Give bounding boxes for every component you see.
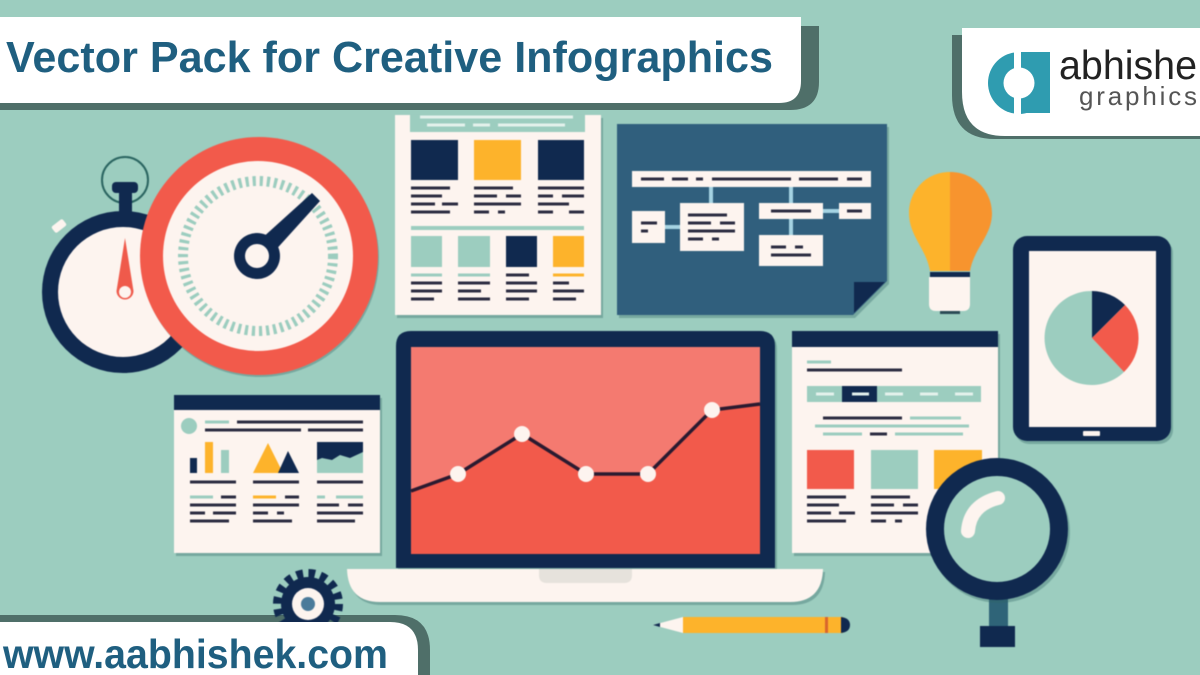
triangle chart <box>253 443 299 473</box>
icon: gear <box>278 574 338 634</box>
panel: report document <box>395 115 601 315</box>
title: Vector Pack for Creative Infographics <box>6 33 773 82</box>
icon: abhishek logo mark <box>988 50 1050 115</box>
line chart on screen <box>411 347 760 554</box>
bar chart <box>190 442 229 473</box>
gauge <box>140 137 378 375</box>
logo subtitle: graphics <box>1079 81 1197 111</box>
logo wordmark: abhishe <box>1059 42 1197 88</box>
panel: dashboard document <box>174 395 380 553</box>
title banner <box>0 17 819 110</box>
laptop base <box>347 569 823 602</box>
icon: pencil <box>653 617 850 633</box>
icon: folded corner <box>854 282 885 313</box>
icon: magnifying glass <box>935 467 1059 647</box>
pie chart <box>1045 291 1139 385</box>
logo panel <box>952 28 1200 139</box>
area chart <box>317 442 363 473</box>
website banner <box>0 574 430 675</box>
laptop <box>347 331 823 602</box>
icon: light bulb <box>909 172 992 314</box>
panel: web page document <box>792 331 998 553</box>
panel: flowchart sheet <box>617 124 887 315</box>
stopwatch <box>42 157 204 373</box>
icon: tablet with pie chart <box>1013 236 1171 441</box>
